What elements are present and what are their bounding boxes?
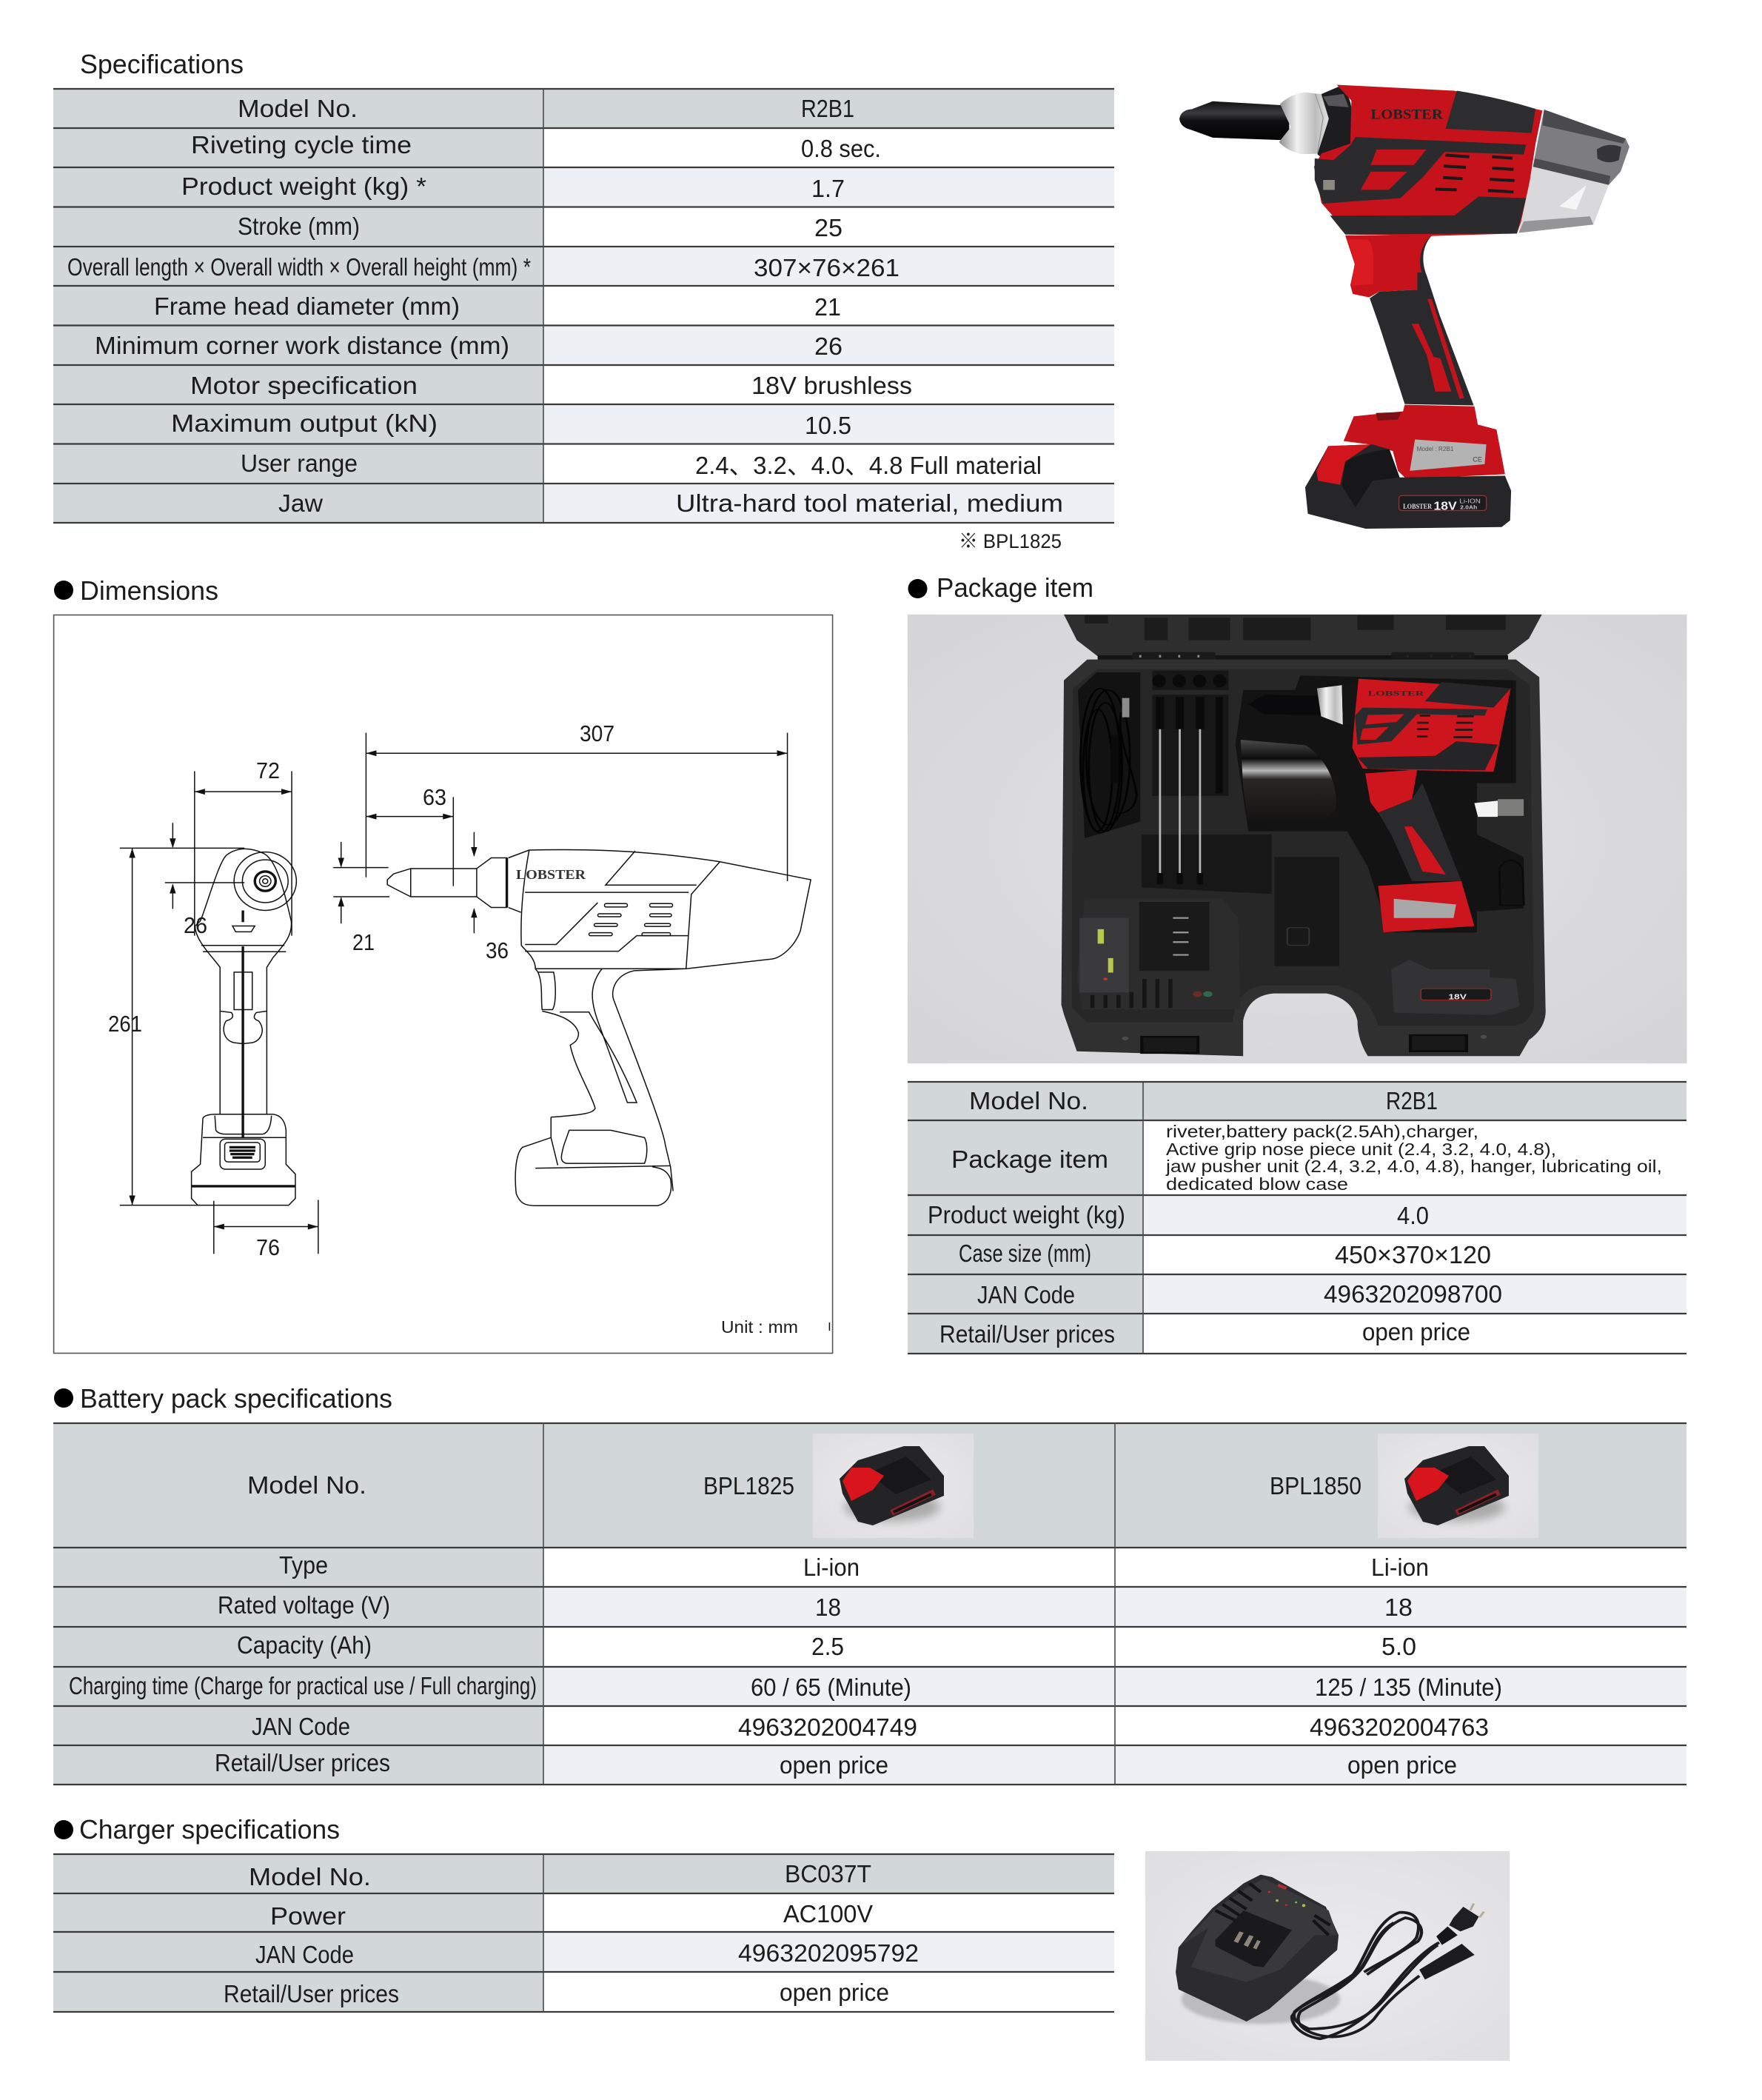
panel: dimension drawing: 36 [486,937,509,963]
table: riveter specifications: User range [241,449,358,477]
table: charger specifications: Model No. [249,1863,371,1890]
cord bundle [1080,689,1136,833]
table: battery pack specifications: Rated voltage (V) [218,1591,390,1619]
blow case and gun compartments [1236,675,1524,932]
photo: package case contents: LOBSTER [1368,689,1424,698]
tray inner [1072,669,1534,1026]
table: package item: 4963202098700 [1324,1280,1502,1308]
trigger [1348,239,1373,286]
table: battery pack specifications: BPL1850 [1270,1472,1361,1499]
table: riveter specifications: Ultra-hard tool material, medium [676,489,1063,517]
hanger [1499,860,1524,905]
dark cap [1446,90,1535,133]
table: battery pack specifications: 4963202004763 [1310,1713,1489,1741]
table: charger specifications: Power [270,1902,346,1930]
table: battery pack specifications: BPL1825 [703,1472,794,1499]
dark band [1315,137,1526,204]
table: riveter specifications: 0.8 sec. [801,135,881,162]
table: riveter specifications: 25 [814,214,843,241]
panel: dimension drawing [54,615,833,1354]
footnote: battery model: ※ BPL1825 [959,530,1062,552]
case hardware [1122,1037,1128,1040]
table: package item: open price [1362,1318,1470,1345]
photo: package case contents [908,615,1686,1063]
collar [1279,93,1331,154]
table: riveter specifications: Product weight (kg) * [181,173,426,200]
table: riveter specifications: Model No. [238,95,358,122]
table: charger specifications: JAN Code [255,1941,354,1968]
table: riveter specifications [53,89,1114,523]
table: battery pack specifications: 2.5 [811,1633,844,1660]
panel: dimension drawing: 307 [580,720,614,746]
heading: Specifications: Specifications [80,49,244,79]
gun body [1353,679,1511,772]
rod compartment [1142,671,1272,894]
blow case [1241,740,1336,826]
hinge gap [1098,655,1508,661]
table: riveter specifications: 10.5 [805,412,851,439]
table: package item: Retail/User prices [939,1320,1115,1348]
table: battery pack specifications: 18 [1384,1594,1413,1621]
panel: dimension drawing: 21 [352,929,375,955]
dimension values: 72 [256,758,280,783]
table: battery pack specifications: open price [1347,1751,1457,1779]
grip dark [1370,235,1474,405]
case lid [1064,615,1542,656]
jaw pushers [1160,729,1200,873]
photo: riveter product: 18V [1433,500,1457,512]
table: package item: riveter,battery pack(2.5Ah),charger, [1166,1122,1478,1141]
table: riveter specifications: Minimum corner work distance (mm) [95,332,509,359]
table: charger specifications: BC037T [785,1860,871,1887]
clear dust case upper [1533,110,1629,185]
table: riveter specifications: Stroke (mm) [238,213,360,240]
table: package item [908,1082,1686,1354]
lower channel [1274,857,1339,966]
battery slot [1216,1910,1292,1967]
logo: LOBSTER [1371,107,1443,122]
table: package item: dedicated blow case [1166,1174,1348,1194]
battery [1305,444,1511,529]
table: riveter specifications: 2.4、3.2、4.0、4.8 Full material [695,452,1042,479]
red housing [1314,84,1542,236]
gun nose [1248,695,1321,715]
table: battery pack specifications: 18 [815,1594,841,1621]
clear dust case lower [1518,167,1609,233]
hinges [1133,652,1474,661]
battery in case [1391,960,1520,1015]
table: battery pack specifications: Retail/User prices [215,1749,390,1776]
heading: Package item: Package item [937,572,1093,603]
red window [1361,150,1426,190]
table: package item: 4.0 [1397,1202,1429,1229]
panel: dimension drawing: 76 [256,1234,280,1260]
plugs [1436,1927,1458,1945]
table: package item: R2B1 [1386,1087,1438,1114]
table: package item: jaw pusher unit (2.4, 3.2, 4.0, 4.8), hanger, lubricating oil, [1165,1157,1662,1176]
panel: dimension drawing: Unit : mm [721,1317,798,1337]
charger shadow [1182,1975,1340,2024]
cord compartment [1078,672,1140,838]
charger body [1176,1875,1339,2022]
table: riveter specifications: 26 [814,332,843,360]
table: riveter specifications: 21 [814,293,841,321]
table: battery pack specifications: 125 / 135 (Minute) [1315,1673,1502,1701]
photo: riveter product: 2.0Ah [1460,504,1478,511]
dimension lines and arrows [120,733,829,1331]
table: riveter specifications: Overall length × Overall width × Overall height (mm) * [67,253,531,281]
charger [1077,899,1241,1009]
table: battery pack specifications: Li-ion [1371,1554,1429,1581]
case base [1062,660,1546,1056]
table: riveter specifications: Jaw [278,489,323,517]
table: battery pack specifications: open price [780,1751,888,1779]
table: battery pack specifications: Capacity (Ah) [237,1631,372,1659]
photo: riveter product: Li-ION [1459,498,1481,505]
lower dark band [1330,196,1526,235]
grip red [1345,235,1432,297]
table: charger specifications: open price [780,1979,889,2006]
gun base [1379,881,1474,932]
panel: dimension drawing: 261 [108,1011,142,1037]
table: charger specifications: 4963202095792 [738,1939,919,1967]
table: battery pack specifications: 60 / 65 (Minute) [751,1673,911,1701]
small switch [1323,180,1335,190]
gun grip [1365,769,1417,812]
table: battery pack specifications: Model No. [247,1471,366,1499]
heading: Battery pack specifications: Battery pack specifications [80,1383,392,1414]
panel: dimension drawing: 26 [184,912,207,938]
table: package item: 450×370×120 [1335,1241,1491,1268]
table: battery pack specifications: JAN Code [252,1713,350,1740]
table: package item: Product weight (kg) [928,1201,1125,1228]
photo: riveter product [1179,84,1629,529]
drawing: side view [387,849,811,1206]
table: charger specifications: Retail/User prices [224,1980,399,2007]
table: battery pack specifications: Li-ion [803,1554,860,1581]
table: battery pack specifications: Type [279,1551,328,1579]
nose piece [1474,800,1498,817]
table: charger specifications [53,1854,1114,2012]
table: package item: JAN Code [977,1281,1075,1308]
nose [1179,101,1289,140]
table: battery pack specifications [53,1422,1686,1785]
photo: battery BPL1825 [813,1434,974,1538]
power cord [1292,1913,1439,2039]
table: riveter specifications: Frame head diameter (mm) [154,292,460,320]
table: riveter specifications: 18V brushless [751,372,912,399]
grip accents [1412,299,1464,399]
photo: charger [1145,1851,1510,2061]
panel: dimension drawing: 63 [423,784,446,810]
table: riveter specifications: 1.7 [811,175,845,202]
case latches [1142,1035,1467,1053]
table: battery pack specifications: 4963202004749 [738,1713,917,1741]
table: battery pack specifications: Charging time (Charge for practical use / Full charging) [69,1672,537,1699]
table: riveter specifications: R2B1 [801,95,854,122]
ribs [1216,1883,1330,1935]
table: package item: Model No. [969,1087,1088,1114]
table: riveter specifications: 307×76×261 [754,254,900,281]
table: package item: Package item [951,1146,1108,1173]
side view logo: LOBSTER [516,867,586,882]
table: battery pack specifications: 5.0 [1381,1633,1416,1660]
photo: battery BPL1850 [1378,1434,1538,1538]
table: package item: Case size (mm) [959,1240,1091,1267]
table: riveter specifications: Motor specification [190,372,418,399]
vents [1436,156,1515,192]
heading: Charger specifications: Charger specifications [79,1814,340,1845]
control panel LEDs [1268,1891,1270,1893]
table: package item: Active grip nose piece unit (2.4, 3.2, 4.0, 4.8), [1166,1140,1556,1159]
photo: riveter product: LOBSTER [1403,503,1433,510]
neck [1317,87,1356,161]
drawing: front view [192,849,296,1206]
heading: Dimensions: Dimensions [80,575,218,606]
rating label [1410,439,1487,471]
photo: package case contents: 18V [1448,992,1467,1001]
table: riveter specifications: Maximum output (kN) [171,409,438,437]
table: charger specifications: AC100V [783,1900,873,1927]
photo: riveter product: CE [1473,455,1482,463]
photo: riveter product: Model : R2B1 [1417,446,1454,452]
table: riveter specifications: Riveting cycle time [191,131,412,158]
battery mount [1344,405,1505,479]
